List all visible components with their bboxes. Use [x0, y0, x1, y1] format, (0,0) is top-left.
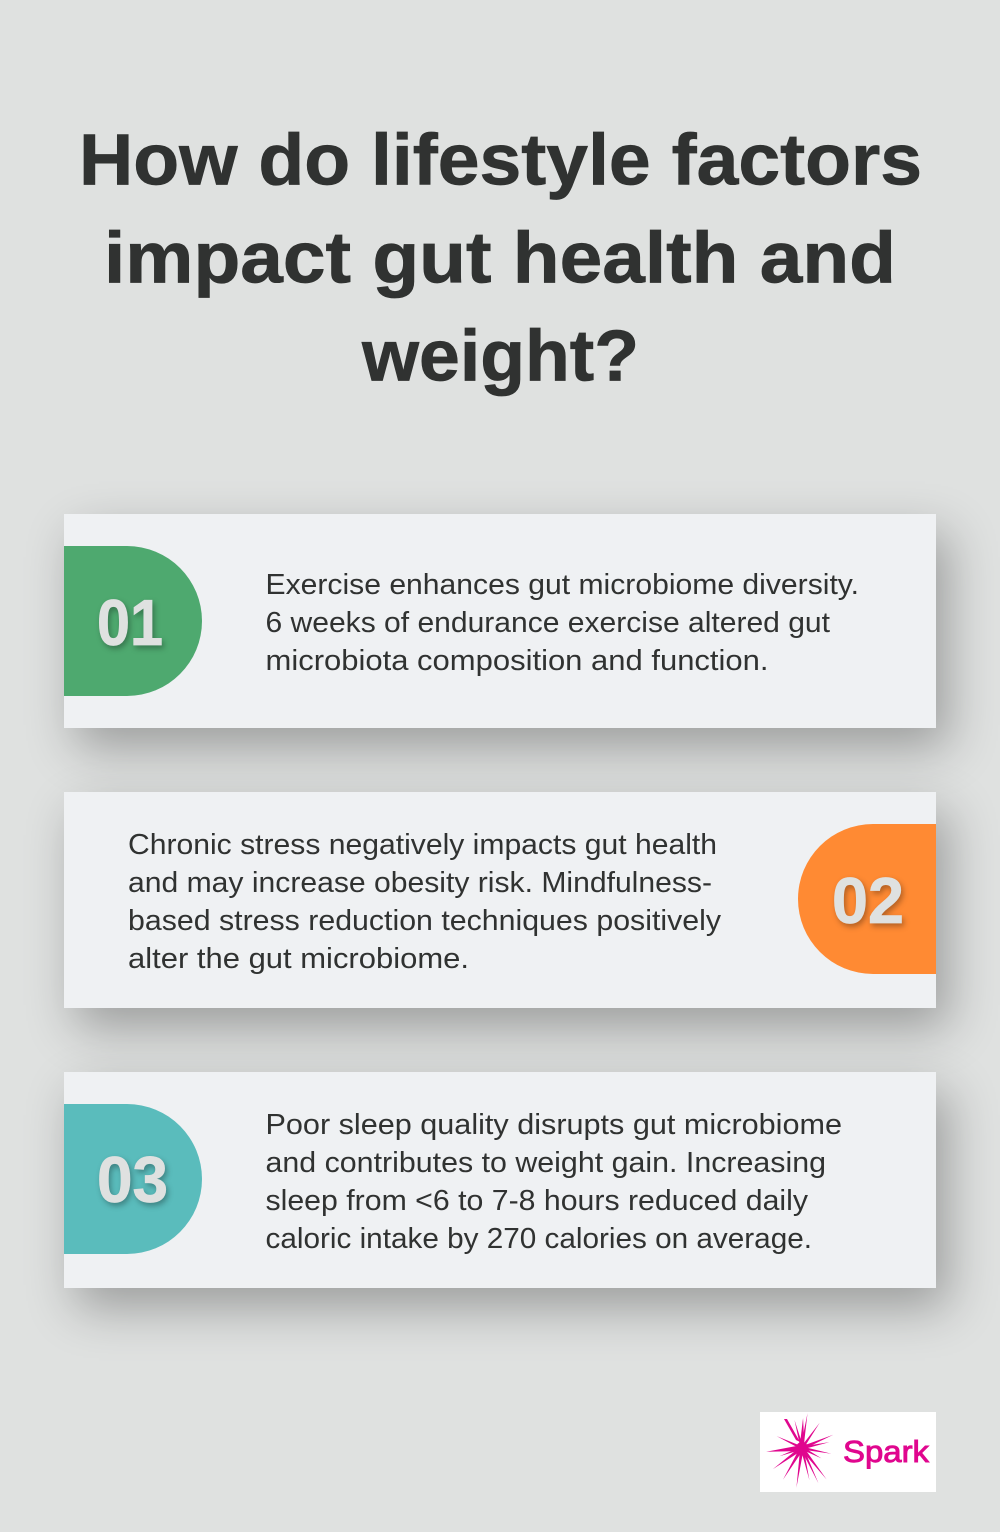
title	[79, 120, 922, 396]
icon: spark burst	[766, 1414, 833, 1488]
panel: exercise	[64, 514, 936, 728]
text: sleep	[266, 1109, 842, 1255]
number 03: 03	[97, 1143, 168, 1216]
text: stress: and may increase obesity risk. Mindfulness-	[128, 867, 712, 899]
badge: 01	[64, 546, 202, 696]
number 01: 01	[97, 586, 163, 659]
text: stress: based stress reduction techniques positively	[128, 905, 722, 937]
logo: Spark	[760, 1412, 936, 1492]
text: exercise: microbiota composition and function.	[266, 645, 768, 677]
wordmark: Spark	[843, 1434, 930, 1469]
text: sleep: sleep from <6 to 7-8 hours reduced daily	[266, 1185, 809, 1217]
text: exercise: 6 weeks of endurance exercise altered gut	[266, 607, 830, 639]
title: How do lifestyle factors	[79, 120, 922, 200]
text: stress: Chronic stress negatively impacts gut health	[128, 829, 717, 861]
number 02: 02	[832, 864, 904, 937]
text: exercise	[266, 569, 859, 677]
text: stress	[128, 829, 722, 975]
title: weight?	[361, 316, 639, 396]
text: sleep: caloric intake by 270 calories on average.	[266, 1223, 812, 1255]
text: exercise: Exercise enhances gut microbiome diversity.	[266, 569, 859, 601]
badge: 03	[64, 1104, 202, 1254]
title: impact gut health and	[104, 218, 896, 298]
panel: sleep	[64, 1072, 936, 1288]
text: stress: alter the gut microbiome.	[128, 943, 469, 975]
panel: stress	[64, 792, 936, 1008]
text: sleep: and contributes to weight gain. Increasing	[266, 1147, 826, 1179]
text: sleep: Poor sleep quality disrupts gut microbiome	[266, 1109, 842, 1141]
badge: 02	[798, 824, 936, 974]
